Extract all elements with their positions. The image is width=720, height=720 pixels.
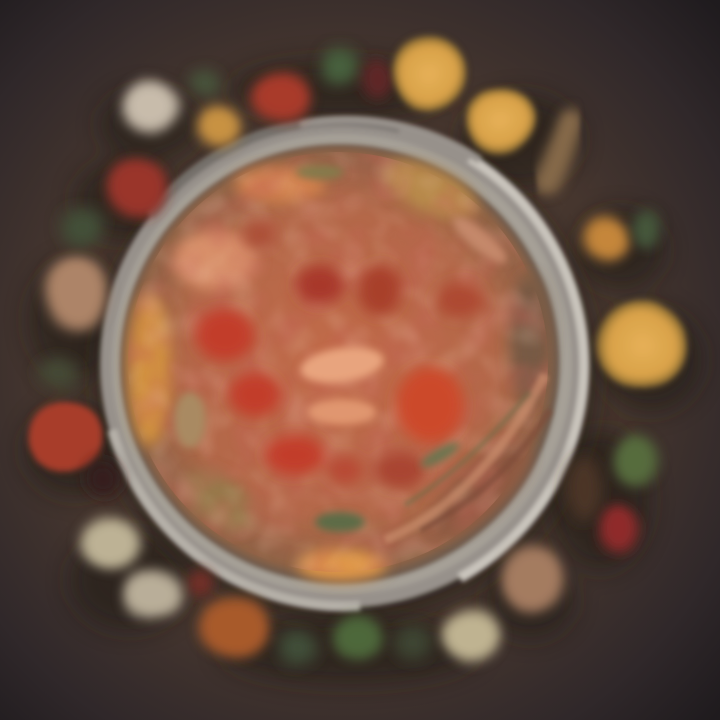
ingredient: pale shallot left — [44, 255, 108, 331]
ingredient: green leaf right — [632, 209, 660, 247]
ingredient: pink shallot bottom right — [501, 547, 565, 611]
ingredient: yellow bowl top — [391, 35, 467, 111]
ingredient: green herb upper — [190, 71, 220, 97]
ingredient: white garlic left — [81, 518, 141, 570]
food: light centre strands — [174, 210, 512, 448]
food: mottled spice texture — [120, 145, 560, 585]
ingredient: brown spice right — [565, 454, 601, 522]
ingredient: red tomato upper left — [106, 158, 168, 218]
plate shadow — [96, 128, 596, 620]
ingredient: orange spice right — [584, 217, 628, 261]
ingredient: small red bottom — [188, 571, 214, 597]
ingredient: green leaf upper left — [61, 207, 103, 245]
ingredient: white garlic bottom — [443, 610, 501, 660]
ingredient: dark red chili top — [361, 60, 391, 100]
ingredient: faint green bottom — [279, 629, 317, 667]
ingredient: orange tomato bottom — [199, 598, 269, 656]
ingredient: red tomato top — [251, 73, 311, 121]
ingredient: green herb bottom — [333, 617, 383, 659]
ingredient: red chili right — [600, 505, 638, 553]
ingredient: green herb left — [39, 358, 77, 388]
ingredient: large yellow bowl right — [597, 300, 687, 390]
food: red spice blotches — [195, 221, 484, 488]
ingredient: green herb top — [321, 48, 359, 84]
food: main sauce base — [120, 145, 560, 585]
ingredient: dark green bottom — [394, 626, 432, 660]
ingredient: small yellow top — [196, 106, 242, 148]
ingredient: green herb right — [615, 437, 659, 485]
plate: outer rim — [100, 120, 586, 608]
food: green herb accents — [296, 165, 462, 532]
ingredient: dark shadow near tomato — [86, 459, 120, 497]
food: sweeping strands lower right — [385, 375, 550, 540]
ingredient: white garlic lower left — [123, 570, 183, 618]
food: orange and yellow edges — [129, 149, 550, 581]
ingredient: white garlic top left — [122, 81, 178, 131]
ingredient: ginger root — [546, 122, 572, 182]
ingredient: red tomato left — [29, 401, 103, 471]
ingredient: yellow bowl top right — [465, 86, 535, 156]
